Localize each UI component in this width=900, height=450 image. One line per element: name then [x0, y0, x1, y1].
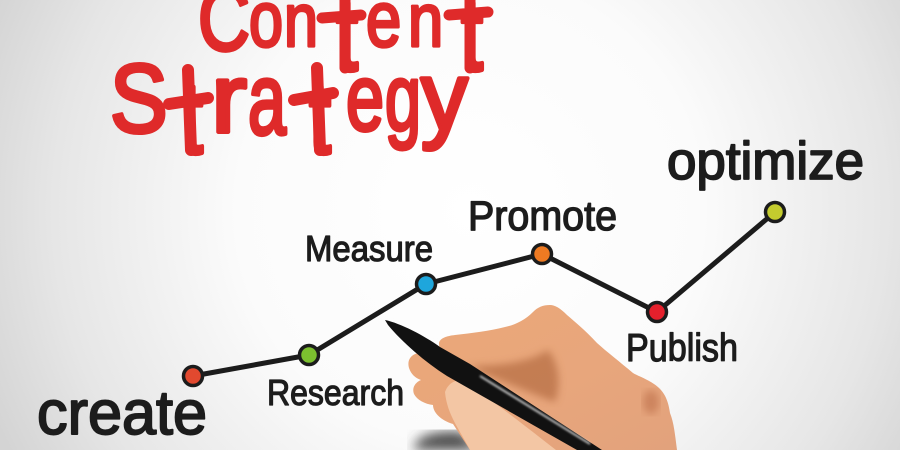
title line: Strategy: e [346, 47, 384, 151]
hand shadow [414, 432, 480, 450]
title line: Strategy: t [309, 61, 331, 175]
line chart [184, 202, 784, 386]
title line: Strategy: g [385, 46, 421, 151]
title line: Strategy: S [110, 45, 168, 153]
step labels [37, 132, 864, 448]
label: Publish: Publish [626, 326, 738, 369]
label: Research: Research [267, 374, 404, 413]
node: create [184, 366, 202, 386]
hand [408, 305, 677, 450]
node: research [300, 346, 318, 364]
label: Measure: Measure [305, 230, 433, 269]
node: measure [416, 274, 436, 294]
title line: Strategy: y [421, 43, 468, 151]
node: optimize [766, 202, 784, 222]
label: Promote: Promote [468, 193, 617, 239]
title line: Strategy: a [248, 44, 286, 156]
node: publish [648, 302, 666, 322]
trend line [193, 212, 775, 376]
title line: Strategy [110, 43, 468, 175]
hand holding pen [385, 305, 677, 450]
label: create: create [37, 379, 207, 448]
label: optimize: optimize [667, 132, 864, 191]
title line: Strategy: r [211, 44, 247, 153]
node: promote [532, 244, 552, 264]
pen highlight [480, 376, 590, 444]
pen [385, 320, 602, 450]
title line: Strategy: t [181, 61, 203, 175]
title line: Content [198, 0, 488, 93]
title [110, 0, 488, 175]
knuckle [643, 390, 659, 414]
thumb [445, 381, 556, 450]
finger crease shadow [470, 350, 559, 402]
